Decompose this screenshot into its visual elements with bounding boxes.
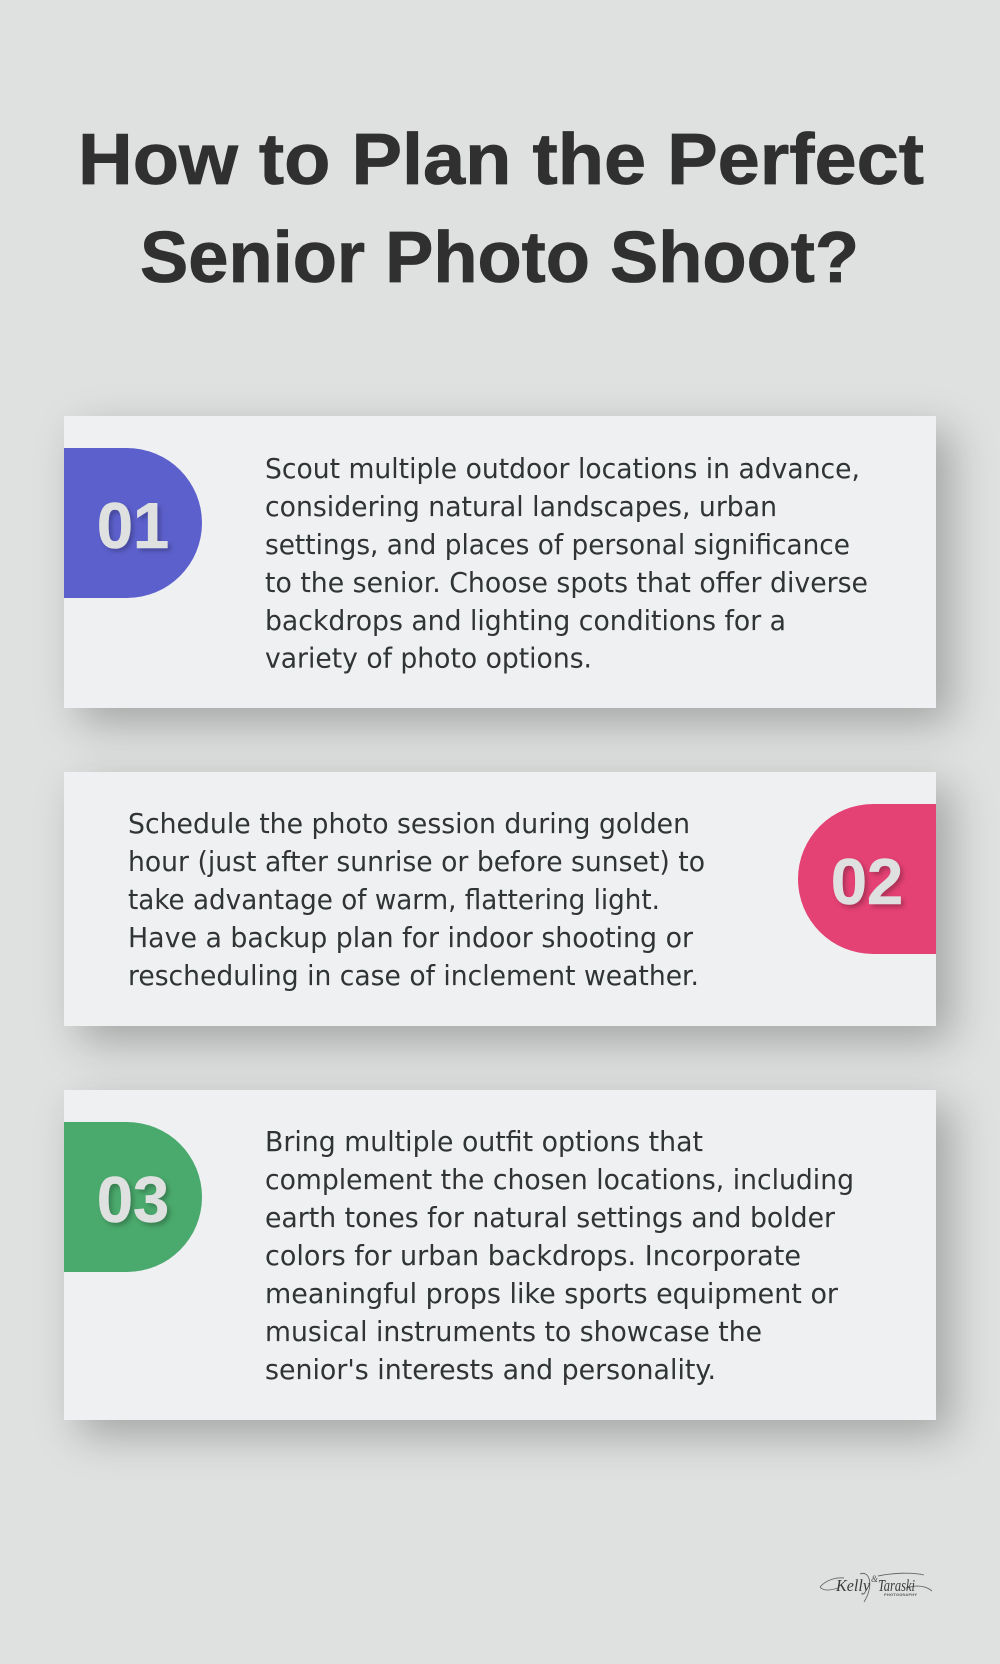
text block: step 3: earth tones for natural settings and bolder: [265, 1202, 836, 1234]
title: How to Plan the Perfect: [78, 120, 924, 200]
badge: 02: [798, 804, 936, 954]
text block: step 3: meaningful props like sports equipment or: [265, 1278, 839, 1310]
text block: step 3: musical instruments to showcase the: [265, 1316, 762, 1348]
title: Senior Photo Shoot?: [140, 218, 859, 298]
panel: step 2 golden hour: [64, 772, 936, 1026]
text block: step 1: settings, and places of personal significance: [265, 529, 850, 561]
text block: step 2: Schedule the photo session during golden: [128, 808, 690, 840]
logo: photographer signature: PHOTOGRAPHY: [884, 1593, 917, 1597]
text block: step 2: [128, 808, 705, 992]
text block: step 3: Bring multiple outfit options that: [265, 1126, 703, 1158]
text block: step 1: variety of photo options.: [265, 642, 592, 674]
text block: step 1: Scout multiple outdoor locations in advance,: [265, 453, 860, 485]
text block: step 1: considering natural landscapes, urban: [265, 491, 777, 523]
text block: step 1: [265, 453, 868, 674]
text block: step 3: senior's interests and personality.: [265, 1354, 716, 1386]
badge: 01: 01: [97, 489, 169, 562]
logo: photographer signature: Kelly: [835, 1576, 870, 1595]
badge: 03: 03: [97, 1163, 169, 1236]
title: [78, 120, 924, 298]
badge: 01: [64, 448, 202, 598]
badge: 02: 02: [831, 845, 903, 918]
text block: step 2: take advantage of warm, flattering light.: [128, 884, 660, 916]
text block: step 3: [265, 1126, 854, 1386]
text block: step 1: backdrops and lighting conditions for a: [265, 605, 786, 637]
text block: step 1: to the senior. Choose spots that offer diverse: [265, 567, 868, 599]
logo: photographer signature: &: [871, 1574, 878, 1584]
text block: step 2: rescheduling in case of inclement weather.: [128, 960, 699, 992]
panel: step 1 scout locations: [64, 416, 936, 708]
text block: step 2: Have a backup plan for indoor shooting or: [128, 922, 694, 954]
text block: step 3: complement the chosen locations, including: [265, 1164, 854, 1196]
logo: photographer signature: Taraski: [878, 1576, 915, 1595]
text block: step 3: colors for urban backdrops. Incorporate: [265, 1240, 801, 1272]
text block: step 2: hour (just after sunrise or before sunset) to: [128, 846, 705, 878]
panel: step 3 outfits and props: [64, 1090, 936, 1420]
badge: 03: [64, 1122, 202, 1272]
